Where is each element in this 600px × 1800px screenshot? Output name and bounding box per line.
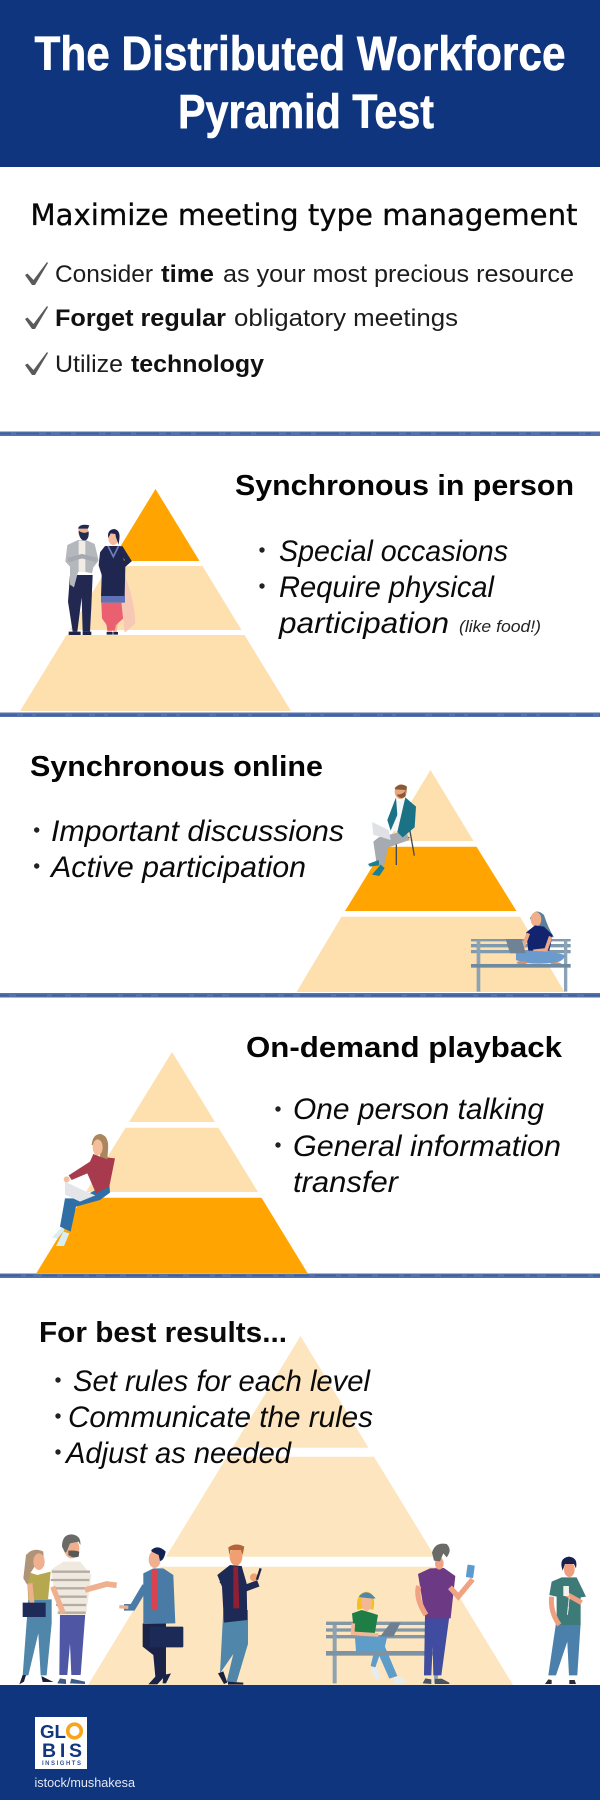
checklist item 2: obligatory meetings	[234, 305, 458, 332]
checklist item 2: Forget regular	[55, 305, 226, 332]
logo: GLOBIS Insights: GL	[40, 1721, 66, 1742]
icon: woman on bench with laptop	[326, 1592, 442, 1684]
icon: man with phone	[418, 1544, 475, 1684]
icon: woman on bench with laptop	[471, 912, 571, 992]
image credit: istock/mushakesa	[34, 1776, 135, 1790]
footer band	[0, 1685, 600, 1800]
title: Pyramid Test	[178, 86, 434, 139]
pyramid: top tier highlighted	[20, 489, 291, 711]
panel: for best results	[19, 1317, 586, 1685]
icon: man in striped shirt	[51, 1534, 117, 1684]
bullet list: Adjust as needed	[64, 1437, 292, 1470]
bullet list: Active participation	[49, 851, 306, 884]
heading: Synchronous in person	[235, 470, 574, 502]
bullet list: transfer	[293, 1166, 399, 1199]
heading: Maximize meeting type management	[30, 198, 578, 232]
pyramid: bottom tier highlighted	[36, 1052, 308, 1273]
logo: GLOBIS Insights	[35, 1717, 87, 1769]
icon: man on chair with laptop	[368, 784, 416, 876]
checklist item 1: time	[161, 261, 214, 288]
logo: GLOBIS Insights: BIS	[42, 1740, 82, 1762]
bullet list	[34, 815, 344, 884]
bullet list: Communicate the rules	[68, 1401, 373, 1434]
bullet list: Set rules for each level	[73, 1365, 371, 1398]
bullet list	[275, 1093, 561, 1199]
heading: For best results...	[39, 1317, 287, 1349]
bullet list: General information	[293, 1130, 561, 1163]
checklist item 1: Consider	[55, 261, 153, 288]
logo: GLOBIS Insights: INSIGHTS	[42, 1761, 81, 1767]
title	[34, 28, 566, 139]
icon: man in navy jacket with phone	[217, 1544, 262, 1685]
checklist item 3: Utilize	[55, 351, 123, 378]
bullet list: participation	[278, 607, 449, 640]
panel: synchronous online	[30, 751, 571, 992]
pyramid: middle tier highlighted	[296, 770, 564, 992]
header banner	[0, 0, 600, 167]
icon: woman sitting with laptop	[52, 1134, 115, 1246]
checklist item 1: as your most precious resource	[223, 261, 574, 288]
heading: Synchronous online	[30, 751, 323, 783]
icon: woman with folder	[19, 1550, 53, 1684]
bullet list	[55, 1365, 373, 1470]
icon: person with earphones	[545, 1557, 586, 1684]
bullet list: Require physical	[279, 571, 495, 604]
bullet list: Important discussions	[51, 815, 344, 848]
checklist item 3: technology	[131, 351, 265, 378]
bullet list: One person talking	[293, 1093, 544, 1126]
icon: businessman with briefcase	[119, 1547, 183, 1684]
checklist item 1	[25, 261, 574, 288]
checklist item 3	[25, 351, 265, 378]
bullet list: (like food!)	[459, 617, 541, 636]
pyramid: background	[88, 1336, 513, 1685]
checklist item 2	[25, 305, 458, 332]
heading: On-demand playback	[246, 1032, 563, 1064]
bullet list	[259, 535, 541, 640]
panel: on-demand playback	[36, 1032, 563, 1273]
panel: synchronous in person	[20, 470, 574, 711]
bullet list: Special occasions	[279, 535, 508, 568]
panel: meeting type management	[25, 198, 578, 378]
icon: couple standing	[65, 525, 135, 635]
